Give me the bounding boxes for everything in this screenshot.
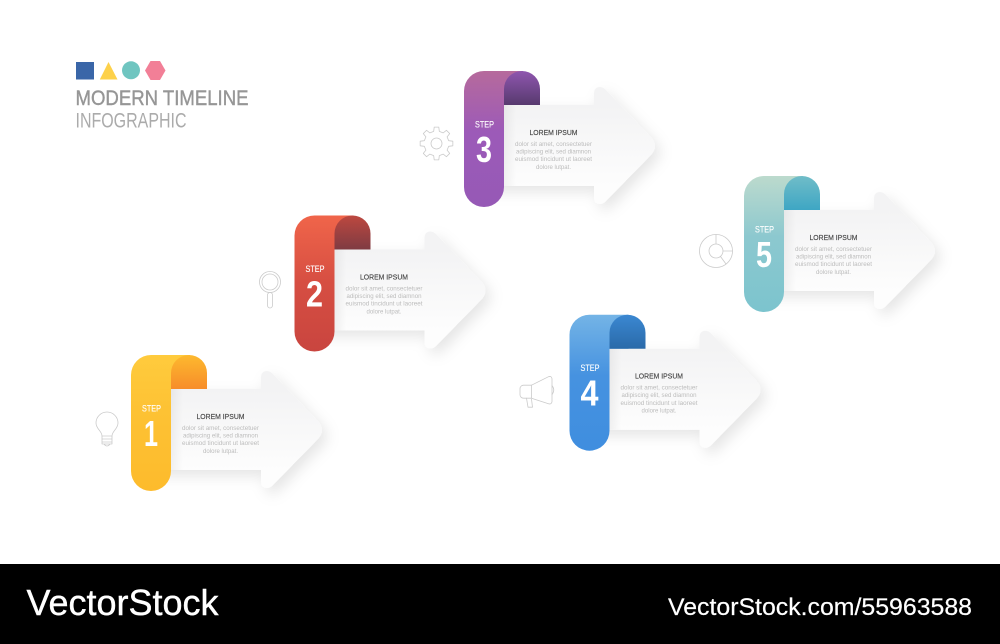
icon: magnifier (260, 272, 280, 308)
icon: gear (420, 127, 453, 160)
step 4: 4 (580, 373, 598, 414)
title: INFOGRAPHIC (76, 110, 186, 132)
icon: light bulb (96, 412, 118, 446)
step 5 (700, 176, 935, 312)
step 3: LOREM IPSUM (530, 128, 578, 137)
footer logo: VectorStock (26, 582, 219, 623)
step 2: euismod tincidunt ut laoreet (346, 301, 423, 308)
step 5: dolore lutpat. (816, 269, 851, 276)
step 1: euismod tincidunt ut laoreet (182, 440, 259, 447)
icon: donut chart (700, 234, 732, 268)
step 1: LOREM IPSUM (196, 412, 244, 421)
step 5: euismod tincidunt ut laoreet (795, 261, 872, 268)
step 2: dolore lutpat. (366, 308, 402, 315)
step 1: dolor sit amet, consectetuer (182, 425, 260, 432)
step 1: dolore lutpat. (203, 448, 238, 455)
logo shapes (76, 61, 166, 80)
step 2: STEP (306, 264, 324, 274)
step 2: 2 (306, 274, 323, 314)
step 4: dolor sit amet, consectetuer (620, 384, 698, 391)
step 3: dolor sit amet, consectetuer (515, 141, 593, 148)
step 4: euismod tincidunt ut laoreet (620, 400, 698, 407)
title (76, 87, 248, 132)
step 1: adipiscing elit, sed diamnon (183, 432, 258, 440)
step 5: adipiscing elit, sed diamnon (796, 254, 871, 260)
step 5: LOREM IPSUM (810, 233, 858, 242)
step 4: dolore lutpat. (642, 408, 677, 415)
step 4: STEP (580, 363, 600, 373)
step 4 (520, 315, 760, 451)
step 1 (92, 355, 322, 491)
step 1: 1 (144, 413, 158, 454)
step 1: STEP (142, 404, 161, 414)
step 4: LOREM IPSUM (635, 372, 683, 381)
step 2: LOREM IPSUM (360, 272, 408, 282)
step 2 (256, 216, 486, 352)
footer url: VectorStock.com/55963588 (668, 594, 972, 621)
step 4: adipiscing elit, sed diamnon (622, 392, 697, 399)
step 3: 3 (476, 129, 492, 170)
step 5: 5 (756, 234, 772, 275)
step 3: euismod tincidunt ut laoreet (515, 156, 592, 163)
icon: megaphone (520, 376, 554, 407)
step 5: STEP (755, 224, 774, 234)
step 3 (420, 71, 655, 207)
step 2: adipiscing elit, sed diamnon (346, 293, 422, 300)
step 2: dolor sit amet, consectetuer (346, 285, 423, 292)
step 3: STEP (475, 120, 494, 130)
title: MODERN TIMELINE (76, 87, 248, 110)
step 5: dolor sit amet, consectetuer (795, 246, 873, 253)
footer band (0, 564, 1000, 644)
step 3: dolore lutpat. (536, 164, 571, 171)
step 3: adipiscing elit, sed diamnon (516, 148, 591, 156)
